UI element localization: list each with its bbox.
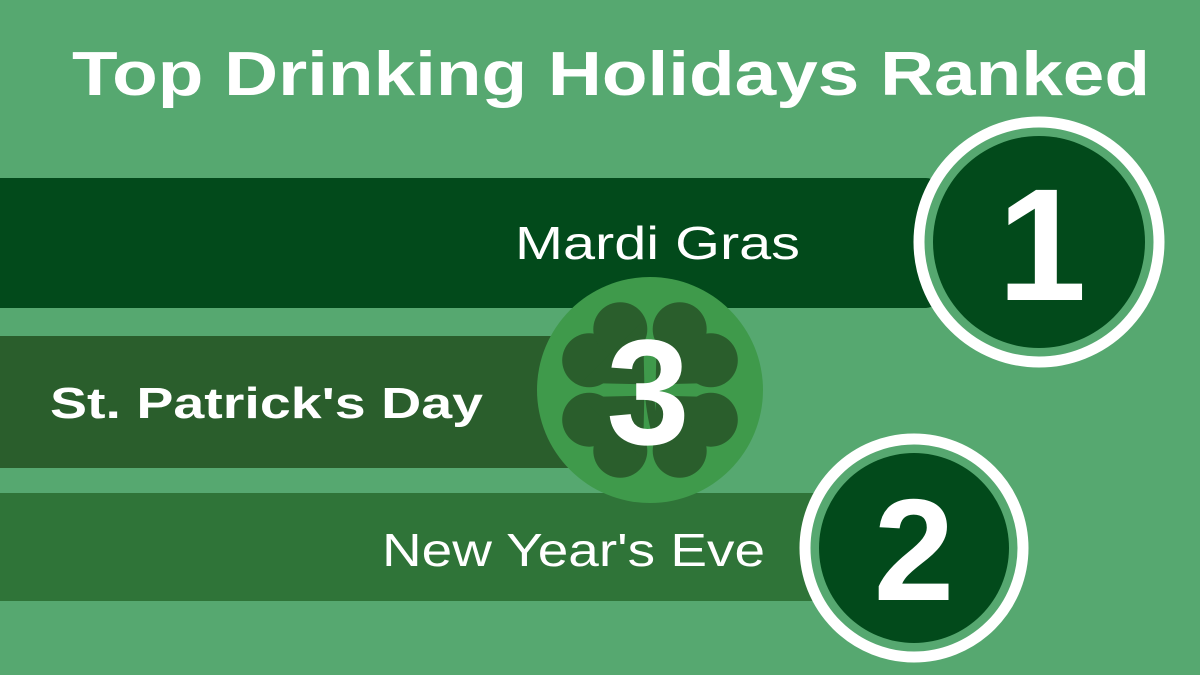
badge: rank 3 with clover: 3 — [606, 308, 690, 476]
bar: New Year's Eve: New Year's Eve — [382, 524, 765, 576]
badge: rank 1 — [919, 122, 1159, 362]
title: Top Drinking Holidays Ranked — [72, 40, 1150, 109]
bar: Mardi Gras — [0, 178, 940, 308]
bar: New Year's Eve — [0, 493, 840, 601]
badge: rank 2: 2 — [874, 469, 954, 631]
badge: rank 2 — [805, 439, 1023, 657]
badge: rank 3 with clover — [537, 277, 763, 503]
badge: rank 1: 1 — [998, 155, 1086, 334]
icon: four-leaf clover — [551, 291, 749, 489]
bar: St. Patrick's Day — [0, 336, 620, 468]
bar: St. Patrick's Day: St. Patrick's Day — [50, 379, 484, 428]
bar: Mardi Gras: Mardi Gras — [515, 217, 800, 269]
